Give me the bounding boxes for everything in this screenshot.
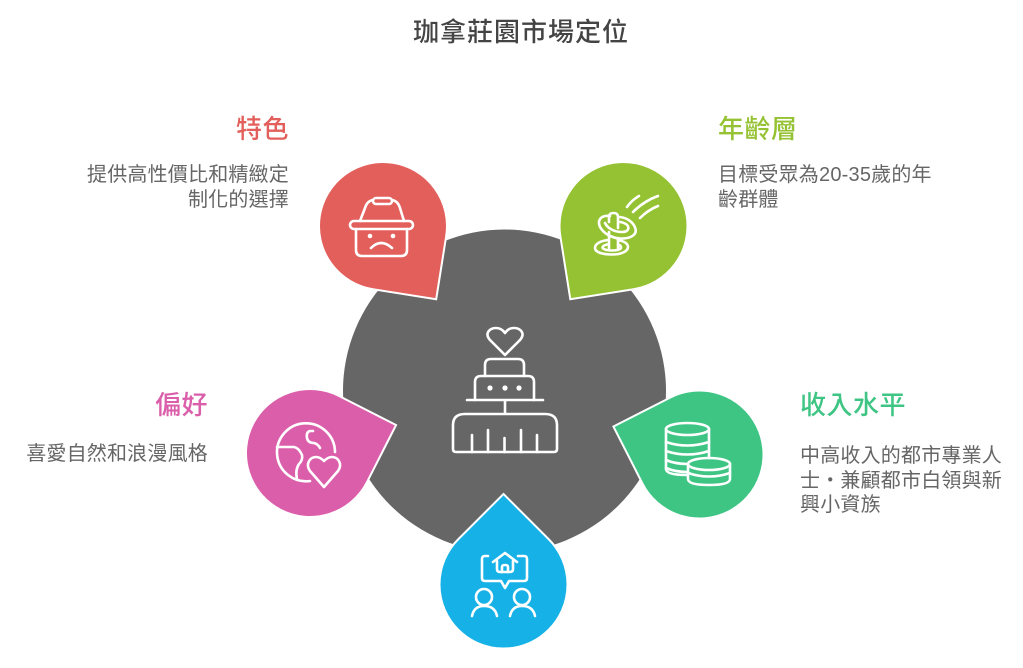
teardrop: green xyxy=(594,366,780,535)
icon: sad basket xyxy=(350,198,413,256)
icon: globe with heart xyxy=(277,423,340,487)
text: 年齡層 description: 齡群體 xyxy=(718,188,779,210)
teardrop: lime green xyxy=(519,137,713,337)
text: 年齡層 description: 目標受眾為20-35歲的年 xyxy=(718,164,932,186)
heading: 特色: 特色 xyxy=(236,114,289,144)
icon: ring toss xyxy=(595,196,658,254)
text: 特色 description: 提供高性價比和精緻定 xyxy=(87,164,289,186)
icon: stacks of coins xyxy=(666,423,730,485)
heading: 收入水平: 收入水平 xyxy=(800,390,906,420)
text: 收入水平 description: 士・兼顧都市白領與新 xyxy=(800,470,1002,492)
heading: 偏好: 偏好 xyxy=(155,390,208,420)
text: 收入水平 description: 中高收入的都市專業人 xyxy=(800,445,1002,467)
text: 年齡層 description xyxy=(718,164,932,210)
teardrop: blue xyxy=(440,494,568,649)
text: 特色 description: 制化的選擇 xyxy=(188,188,289,210)
text: 收入水平 description xyxy=(800,444,1002,516)
central circle xyxy=(343,230,666,552)
text: 收入水平 description: 興小資族 xyxy=(800,494,881,516)
teardrop: red xyxy=(294,137,488,337)
text: 偏好 description: 喜愛自然和浪漫風格 xyxy=(26,443,208,465)
text: 特色 description xyxy=(87,164,289,210)
heading: 年齡層: 年齡層 xyxy=(718,114,798,144)
icon: wedding cake with heart xyxy=(453,328,557,452)
teardrop: pink xyxy=(229,364,416,534)
title: 珈拿莊園市場定位 xyxy=(413,17,629,47)
icon: people with house speech bubble xyxy=(472,553,535,616)
